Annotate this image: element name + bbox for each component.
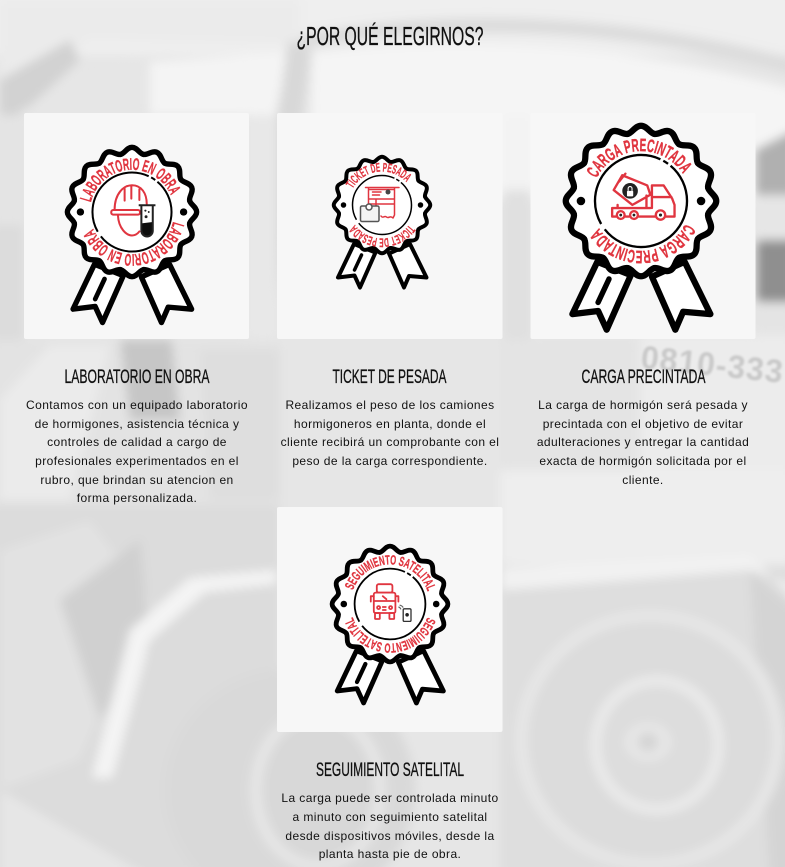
badge: carga precintada: CARGA PRECINTADA xyxy=(587,138,692,177)
badge: seguimiento satelital: SEGUIMIENTO SATELITAL xyxy=(345,555,436,592)
description: de hormigones, asistencia técnica y xyxy=(35,417,239,431)
description: cliente recibirá un comprobante con el xyxy=(281,435,499,449)
description: planta hasta pie de obra. xyxy=(319,847,461,861)
badge: laboratorio en obra: LABORATORIO EN OBRA xyxy=(80,158,180,202)
badge: laboratorio en obra xyxy=(64,144,200,326)
panel: carga precintada xyxy=(530,122,756,487)
badge: ticket de pesada: TICKET DE PESADA xyxy=(345,162,412,188)
title: ¿POR QUÉ ELEGIRNOS? xyxy=(296,21,484,51)
description: Contamos con un equipado laboratorio xyxy=(26,398,248,412)
panel: seguimiento satelital xyxy=(277,507,502,861)
panel: laboratorio en obra xyxy=(24,113,249,505)
description: a minuto con seguimiento satelital xyxy=(292,810,488,824)
description: desde dispositivos móviles, desde la xyxy=(285,829,495,843)
description: controles de calidad a cargo de xyxy=(47,435,227,449)
description: hormigoneros en planta, donde el xyxy=(294,417,486,431)
description: Realizamos el peso de los camiones xyxy=(285,398,495,412)
card background xyxy=(277,507,502,732)
description: rubro, que brindan su atencion en xyxy=(40,473,234,487)
description: precintada con el objetivo de evitar xyxy=(543,417,743,431)
badge: ticket de pesada xyxy=(332,154,432,290)
card background xyxy=(277,113,502,339)
description: peso de la carga correspondiente. xyxy=(292,454,488,468)
description: La carga de hormigón será pesada y xyxy=(538,398,748,412)
heading: TICKET DE PESADA xyxy=(332,367,447,388)
description: exacta de hormigón solicitada por el xyxy=(539,454,747,468)
badge: laboratorio en obra: LABORATORIO EN OBRA xyxy=(84,222,184,266)
heading: CARGA PRECINTADA xyxy=(582,367,706,388)
heading: SEGUIMIENTO SATELITAL xyxy=(316,760,464,781)
description xyxy=(537,398,749,487)
card background xyxy=(24,113,249,339)
description: cliente. xyxy=(622,473,664,487)
description: forma personalizada. xyxy=(77,491,197,505)
badge: seguimiento satelital xyxy=(330,544,450,706)
description xyxy=(281,398,499,468)
description: profesionales experimentados en el xyxy=(35,454,239,468)
description: adulteraciones y entregar la cantidad xyxy=(537,435,749,449)
badge: carga precintada: CARGA PRECINTADA xyxy=(590,225,695,264)
description: La carga puede ser controlada minuto xyxy=(281,791,499,805)
badge: ticket de pesada: TICKET DE PESADA xyxy=(349,224,416,248)
heading: LABORATORIO EN OBRA xyxy=(64,367,210,388)
panel: ticket de pesada xyxy=(277,113,502,468)
background: blurred grey photo of a concrete truck: 0810-333 xyxy=(639,339,785,390)
card background xyxy=(530,113,756,339)
description xyxy=(26,398,248,505)
badge: carga precintada xyxy=(562,122,720,333)
description xyxy=(281,791,499,861)
badge: seguimiento satelital: SEGUIMIENTO SATELITAL xyxy=(345,617,436,653)
